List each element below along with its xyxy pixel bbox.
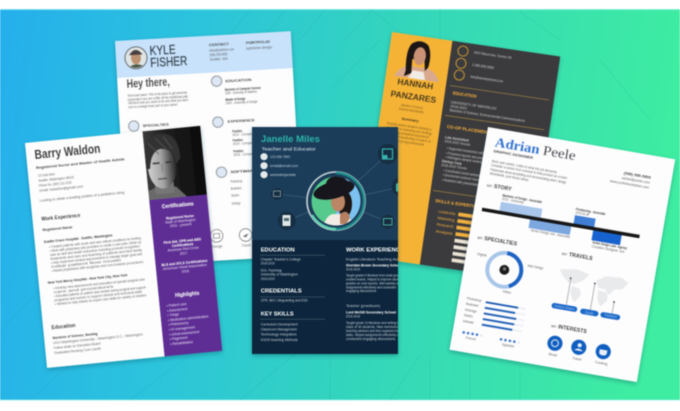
- skill bars: Illustrator: [466, 302, 480, 308]
- section: education: [260, 248, 325, 281]
- contact: adrian@peele.com: [621, 176, 650, 185]
- section: work experience: Sheridan Brown Secondary School: [346, 264, 401, 268]
- orange sidebar: [359, 32, 452, 264]
- portfolio block: PORTFOLIO: [246, 40, 270, 45]
- intro paragraph: especially if you are a little off the traditional path.: [128, 94, 189, 102]
- panel: Adrian Peele resume: [450, 127, 675, 382]
- section: work experience: teaching advisors and then organized tests: [346, 329, 402, 333]
- certifications: American Red Cross: [167, 246, 199, 253]
- section: work experience: • Worked to help infants do expert care skills for variety of children: [55, 293, 147, 306]
- name: Hannah Panizares: [390, 77, 439, 105]
- summary: with strong analytical experience: [385, 129, 430, 139]
- story timeline: Creative Designer Job: [591, 244, 625, 254]
- section: co-op placements: • Supported researchers with field data: [447, 146, 497, 157]
- contact row: email@email.com: [270, 164, 298, 168]
- travel labels: United States: [554, 304, 575, 311]
- certifications: Certifications: [172, 242, 194, 248]
- certifications: 2011 - present: [170, 222, 192, 228]
- section: work experience: Teacher (practicum): [346, 303, 381, 308]
- section: work experience: [41, 207, 147, 307]
- star rating: french: [461, 331, 483, 343]
- section: experience: [212, 115, 264, 158]
- section: work experience: assignments effectively and conducted: [346, 285, 396, 289]
- section: work experience: 2015-2016: [346, 315, 360, 319]
- section: education: 2009 - University of Design: [226, 100, 258, 105]
- star rating: spanish: [499, 338, 520, 350]
- icon: travel: [239, 228, 253, 248]
- story timeline: Freelancing - Associate: [575, 207, 606, 216]
- skill bars: Photoshop: [466, 296, 482, 303]
- contact block: [209, 42, 235, 62]
- contact row: 123-456-7890: [270, 155, 290, 159]
- section: work experience: treatments and care and teaching of patients and their family: [50, 248, 142, 261]
- story timeline: 2014: [575, 211, 590, 217]
- section: education: UVU Washington University - Washington D.C., Washington: [53, 332, 143, 345]
- purple sidebar: [149, 194, 222, 356]
- section: education: Master of Design: [225, 97, 246, 102]
- name: Adrian Peele: Peele: [542, 143, 577, 163]
- section: work experience: Registered Nurse: [42, 224, 73, 232]
- section: experience: 2012 - Company name: [232, 131, 263, 137]
- name: Adrian Peele: Adrian: [494, 135, 541, 157]
- section: skills and expertise: Marketing: [437, 216, 455, 223]
- name: Janelle Miles: Janelle Miles: [261, 134, 320, 144]
- highlights: • Triage: [167, 312, 179, 318]
- section: work experience: 2016-2019: [346, 268, 360, 272]
- story timeline: Bachelor of Design - Associate: [502, 194, 542, 204]
- section: work experience: English Literature Teaching Assistant: [346, 257, 409, 262]
- name: Barry Waldon: Barry Waldon: [34, 142, 101, 162]
- section: co-op placements: • Managed sample inventory: [445, 155, 486, 165]
- story timeline: Senior Design Job - Associate: [530, 228, 570, 239]
- section: work experience: tasks. Helped assignments effectively and: [346, 333, 402, 337]
- section: work experience: New York Mercy Hospital - New York City, New York: [48, 273, 128, 285]
- section heading: specialties: [128, 119, 170, 132]
- section: experience: Position: [233, 138, 243, 143]
- summary: Results-driven student seeking a: [386, 121, 432, 132]
- header band: [115, 31, 293, 78]
- section: work experience: class of 30 students. Was mentored by: [346, 325, 402, 329]
- highlights: • Pagement: [170, 336, 188, 341]
- section: co-op placements: Lab Assistant: [445, 135, 470, 143]
- summary: students and young professionals: [384, 137, 425, 147]
- section: skills and expertise: Analysis: [435, 229, 453, 236]
- panel: Kyle Fisher resume: [115, 31, 303, 266]
- contact icons: 0000 Tillicum Ave, Toronto ON: [474, 51, 512, 60]
- section: work experience: • Educated patients on patient case studies during surgical and support: [54, 285, 146, 298]
- section: experience: Position: [233, 149, 243, 154]
- bio: Worldwide, just those ideas.: [489, 172, 530, 182]
- icon: node right: [392, 178, 399, 196]
- section: education: Bachelor of Science, Nursing: [52, 332, 98, 340]
- section: credentials: [260, 289, 325, 302]
- donut chart: [476, 250, 544, 294]
- highlights: • Rehabilitation: [170, 340, 193, 346]
- section: education: Bachelor of Computer Science: [225, 86, 261, 92]
- heading: my specialties: MY SPECIALTIES: [477, 235, 518, 248]
- section: education: 2016-2021: [450, 104, 468, 111]
- intro paragraph: Tell them how you came to be and what you want: [128, 98, 188, 106]
- certifications: First Aid, CPR and AED: [163, 237, 202, 245]
- section: co-op placements: • Assisted with presentations: [442, 178, 482, 188]
- icon: music: [546, 334, 564, 357]
- highlights: • IV management: [169, 325, 195, 332]
- contact details: Seattle, Washington 98101: [38, 175, 74, 183]
- section: skills and expertise: [427, 198, 482, 265]
- story timeline: 2010 - University: [502, 197, 524, 205]
- donut chart: Web Design: [527, 264, 544, 270]
- section: key skills: Curriculum Development: [261, 322, 298, 326]
- icon: travel: [570, 338, 588, 361]
- section: co-op placements: 2018-2019 Toronto: [441, 163, 467, 171]
- section: co-op placements: • Documented customer research: [443, 173, 483, 183]
- contact block: hello@kylefisher.com: [209, 47, 234, 53]
- world map: [560, 269, 628, 306]
- bio: Passionate about storytelling and demonstrating what I design: [490, 167, 567, 185]
- objective: Looking to obtain a leading position of a pediatrics ruling: [40, 191, 125, 203]
- contact: www.portfolioofadrian.com: [609, 179, 650, 190]
- panel: Barry Waldon resume: [25, 126, 222, 368]
- travel labels: [551, 302, 621, 321]
- section: software: Illustrator: [231, 186, 243, 191]
- section: education: Graduated Nursing Cum Laude: [54, 347, 101, 355]
- section: key skills: KEY SKILLS: [261, 312, 294, 318]
- section: education: 2005 - University of Waterloo: [225, 90, 257, 95]
- name: Adrian Peele: [494, 138, 576, 161]
- section: co-op placements: • Coordinated social campaigns: [443, 168, 484, 178]
- section: work experience: created exams. Helped to improve student: [346, 278, 402, 282]
- certifications: 2017: [180, 251, 188, 256]
- section: education: Bachelor of Science, Environmental Communications: [449, 108, 525, 123]
- section: co-op placements: [433, 123, 542, 205]
- section: work experience: • Work with physicians and providers to create a care plan, follow up: [49, 240, 142, 253]
- subtitle: Bachelor of Science: [401, 103, 423, 110]
- section: co-op placements: 2019-2020 Toronto: [444, 139, 471, 147]
- certifications: Certifications: [162, 201, 194, 211]
- contact block: CONTACT: [209, 42, 230, 47]
- heading: my travels: MY TRAVELS: [561, 251, 594, 262]
- section: experience: 2014 - Company name: [233, 140, 263, 146]
- contact: [610, 171, 652, 189]
- avatar: Kyle: [123, 46, 149, 71]
- job title: GRAPHIC DESIGNER: [493, 149, 534, 160]
- section: key skills: [260, 312, 325, 342]
- certifications: [156, 201, 208, 276]
- contact block: (555) 555-5555: [209, 52, 228, 57]
- contact icons: [454, 45, 513, 87]
- section: software: InDesign: [231, 201, 241, 206]
- section: education: Education: [51, 323, 76, 331]
- subtitle: [399, 103, 425, 114]
- icon: node left: [271, 188, 283, 200]
- donut chart: Digital: [477, 252, 487, 258]
- portrait: Janelle in hat: [307, 172, 365, 230]
- photo: Hannah: [394, 40, 440, 83]
- panel: Hannah Panizares resume: [359, 32, 560, 280]
- section: education: UNIVERSITY OF WATERLOO: [451, 100, 497, 111]
- section: education: EDUCATION: [225, 78, 252, 83]
- section: skills and expertise: Research: [436, 223, 454, 229]
- section: education: [211, 74, 262, 106]
- section: work experience: Lord McGill Secondary School: [346, 311, 396, 315]
- travel labels: Thailand: [604, 313, 617, 319]
- highlights: • Patient care: [166, 302, 187, 308]
- highlights: • Assessment: [167, 307, 188, 313]
- bio: Consider a career from concept to final product as a team: [491, 163, 567, 180]
- section: key skills: Classroom Management: [261, 328, 297, 332]
- star rating: spanish: Spanish: [502, 343, 515, 349]
- section: education: EDUCATION: [261, 248, 295, 254]
- skill bars: Sketch: [464, 313, 473, 319]
- story timeline: [481, 194, 640, 254]
- star rating: french: French: [465, 336, 476, 342]
- section heading: specialties: SPECIALTIES: [143, 123, 170, 128]
- contact details: Phone No: (987) 111-2222: [39, 180, 72, 188]
- name: Kyle Fisher: KYLE: [149, 42, 176, 58]
- highlights: • Medication administration: [168, 314, 209, 322]
- job title: Teacher and Educator: [262, 146, 316, 152]
- summary: co-op role in marketing and strategy: [386, 125, 432, 136]
- certifications: BLS and ATLS Certifications: [161, 259, 208, 267]
- contact details: [38, 169, 83, 193]
- donut chart: Video: [502, 290, 512, 295]
- subtitle: Registered Nurse and Master of Health Admin: [36, 157, 125, 170]
- travel labels: Spain: [585, 310, 594, 315]
- section: work experience: Seattle Grace Hospital - Seattle, Washington: [44, 233, 113, 244]
- highlights: Highlights: [175, 291, 200, 299]
- section: work experience: Work Experience: [41, 213, 81, 223]
- intro paragraph: next in a design team part of your career.: [128, 103, 178, 109]
- portfolio block: [246, 40, 272, 51]
- section: work experience: care and procedures: [54, 285, 114, 294]
- section: work experience: • Assist physicians with surgeries and non-invasive procedures: [51, 260, 144, 273]
- highlights: • Urinal assessment: [169, 330, 200, 337]
- section: work experience: grades on oral reports. Met weekly with: [346, 282, 402, 286]
- contact row: [260, 153, 298, 178]
- intro paragraph: Short and sweet. This is the place to get personal,: [127, 91, 188, 98]
- section: software: Photoshop: [230, 179, 243, 184]
- section: education: University of Washington: [261, 273, 298, 277]
- contact details: email: bwaldon@gmail.com: [39, 184, 83, 193]
- certifications: American Heart Association: [163, 263, 207, 271]
- name: Hannah Panizares: HANNAH: [397, 77, 434, 92]
- highlights: • Phlebotomy: [168, 321, 189, 327]
- contact block: Seattle, WA: [210, 57, 229, 62]
- story timeline: Senior Design Lead - Agency: [592, 240, 627, 250]
- subtitle: Business Administration: [399, 107, 424, 114]
- section: work experience: Taught grade 10 literature and writing to a: [346, 321, 402, 325]
- intro paragraph: [127, 91, 189, 109]
- section: education: Chapter Teacher's College: [261, 258, 301, 262]
- greeting: Hey there,: [126, 77, 170, 91]
- bio: [490, 160, 568, 185]
- section: co-op placements: • Prepared reports and presentations: [446, 151, 496, 162]
- contact: (555) 555-5555: [623, 170, 652, 180]
- section: education: 2016-2019: [261, 277, 275, 281]
- contact row: website/janelle: [270, 173, 296, 177]
- summary: and proven leadership in teams of: [385, 133, 431, 144]
- section: experience: Position: [232, 129, 242, 134]
- section: key skills: Technology Integration: [261, 332, 297, 336]
- section: software: SOFTWARE: [230, 169, 257, 174]
- section: work experience: initial patient flow model: [51, 258, 122, 269]
- icon: node lower left: [278, 212, 296, 230]
- section: education: B.Ed., Psychology: [261, 269, 282, 273]
- section: work experience: conducted engaging discussions.: [346, 337, 396, 341]
- icon: travel: Travel: [241, 243, 251, 248]
- icon: design: [210, 229, 224, 249]
- icon: node lower right: [381, 215, 395, 229]
- section: education: Follow deals on Education Board: [53, 342, 101, 350]
- section: work experience: [345, 246, 399, 342]
- section: credentials: CPR, BEC Lifeguarding and ESS: [261, 298, 308, 302]
- icon: design: Design: [212, 244, 223, 249]
- contact details: 123 Grant Street: [38, 172, 55, 178]
- section: credentials: CREDENTIALS: [261, 289, 302, 295]
- skill bars: InDesign: [465, 308, 477, 314]
- contact icons: hello@hannahpanizares.com: [470, 75, 503, 84]
- icon: music: Music: [548, 352, 558, 358]
- bio: More user-centric. Listen to what the job demands: [492, 159, 557, 174]
- section: software: Sketch: [231, 193, 239, 198]
- section: work experience: • Treated patients with acute and rare critical conditions for testing: [49, 236, 141, 249]
- highlights: [165, 290, 211, 346]
- section: work experience: programs and nurses to support clinical and technical skills: [54, 290, 143, 302]
- certifications: State of Washington: [165, 218, 196, 225]
- photo: Barry portrait: [142, 126, 207, 200]
- section: work experience: • Develop new assessments and education of special surgical care: [53, 277, 145, 290]
- section: work experience: • Help implement medical improvements to manage larger goal care: [51, 252, 143, 265]
- heading: my interests: MY INTERESTS: [551, 323, 588, 335]
- section: skills and expertise: Leadership: [438, 210, 456, 216]
- heading: my story: MY STORY: [486, 183, 513, 193]
- section: education: [51, 316, 144, 355]
- section: co-op placements: Startup Corp: [442, 159, 462, 166]
- section: education: EDUCATION: [452, 90, 477, 99]
- connector lines: [283, 160, 392, 220]
- travel pins: [565, 277, 618, 314]
- icon: cooking: [593, 343, 612, 366]
- contact icons: 1-555-555-5555: [472, 63, 494, 70]
- section: experience: 2016 - Company name: [233, 151, 264, 157]
- section: work experience: Taught grades 9 literature from small groups: [346, 274, 402, 278]
- section: work experience: care as well and health instruction including promote recognition: [50, 244, 140, 257]
- portfolio block: kylefisher.design: [246, 45, 272, 51]
- section: experience: EXPERIENCE: [228, 118, 255, 124]
- skill bars: [463, 296, 526, 333]
- name: Kyle Fisher: [149, 41, 188, 70]
- certifications: Registered Nurse: [166, 214, 194, 221]
- section: work experience: engaging discussions.: [346, 289, 377, 293]
- section: co-op placements: CO-OP PLACEMENTS: [447, 124, 493, 136]
- section: key skills: ESOS teaching Methods: [261, 338, 298, 342]
- skill bars: Animate: [463, 319, 474, 325]
- name: Kyle Fisher: FISHER: [150, 53, 188, 70]
- section: skills and expertise: SKILLS & EXPERTISE: [435, 198, 479, 209]
- icon: travel: Travel: [572, 356, 582, 362]
- name: Hannah Panizares: PANZARES: [390, 90, 437, 105]
- panel: Janelle Miles resume: [252, 127, 412, 354]
- section: software: [216, 165, 259, 206]
- certifications: 2016: [181, 269, 189, 274]
- section: work experience: WORK EXPERIENCE: [346, 248, 404, 254]
- summary: [384, 115, 434, 148]
- icon: cooking: Cooking: [595, 360, 608, 366]
- section: education: [445, 85, 549, 130]
- summary: Summary: [401, 117, 420, 123]
- icon: node top right: [378, 144, 398, 164]
- section: education: 2016-2019: [261, 262, 275, 266]
